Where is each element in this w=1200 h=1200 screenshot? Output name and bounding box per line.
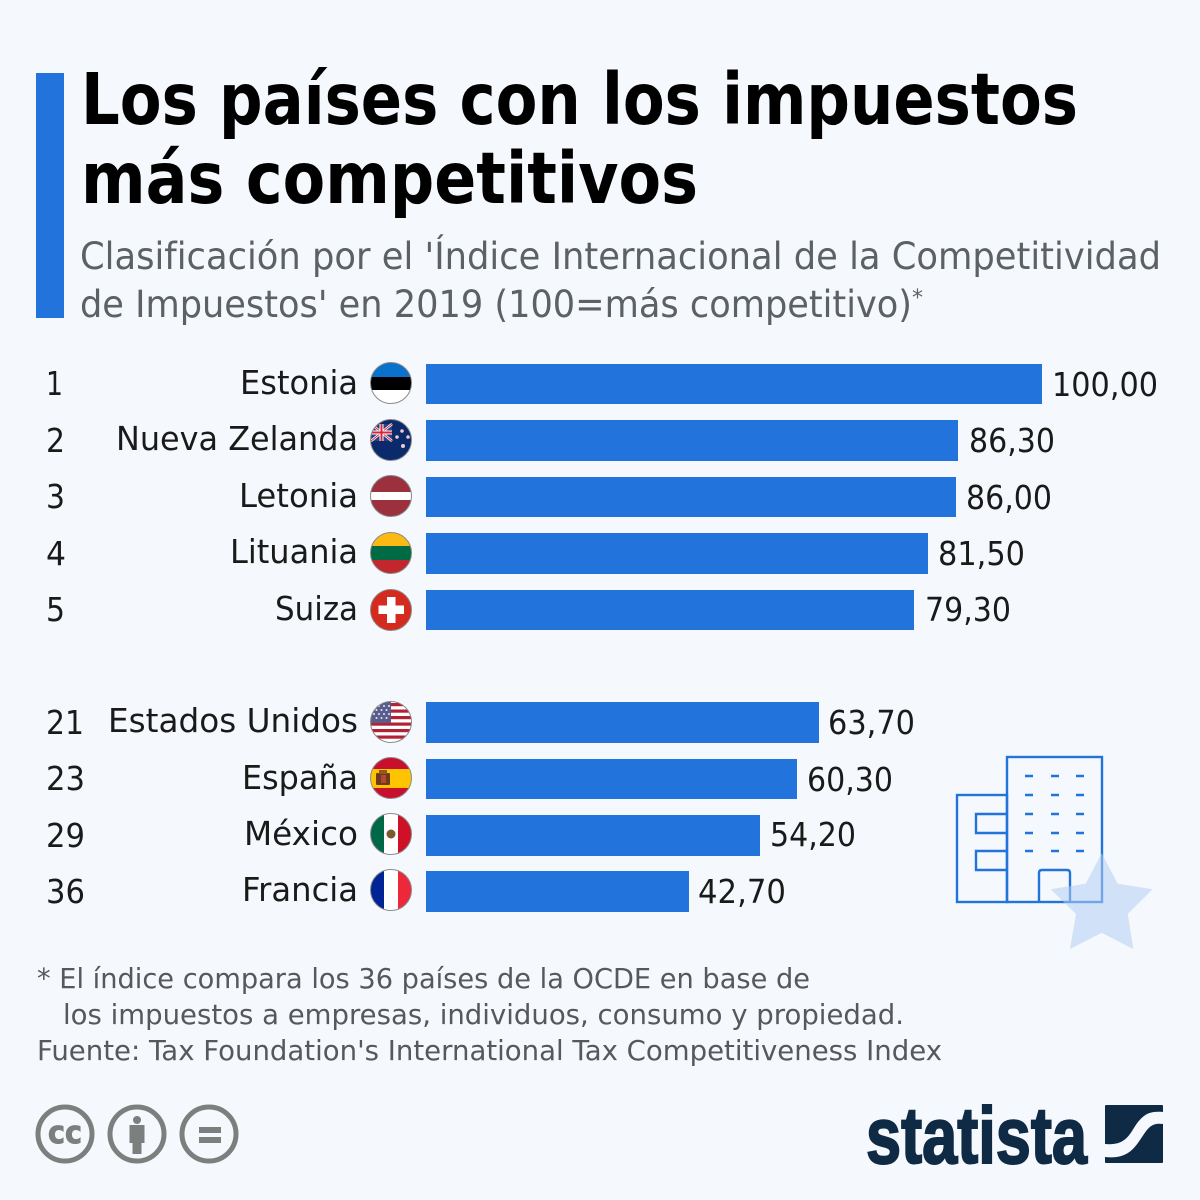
- chart: selected countries: [46, 701, 915, 912]
- row: Estonia: [46, 362, 1158, 404]
- row: España: 23: [46, 759, 85, 798]
- row: México: [46, 813, 856, 856]
- footnote and source: Fuente: Tax Foundation's International Tax Competitiveness Index: [37, 1034, 942, 1067]
- row: Lituania: 81,50: [938, 534, 1025, 573]
- row: España: España: [242, 758, 358, 797]
- row: Suiza: 5: [46, 590, 65, 629]
- icon: no derivatives: [182, 1107, 236, 1161]
- subtitle: de Impuestos' en 2019 (100=más competitivo): [80, 283, 912, 326]
- row: Estados Unidos: 63,70: [828, 703, 915, 742]
- subtitle: Clasificación por el 'Índice Internacional de la Competitividad: [80, 234, 1161, 278]
- icon: attribution: [110, 1107, 164, 1161]
- row: Estonia: 1: [46, 364, 63, 403]
- row: Letonia: 86,00: [966, 478, 1052, 517]
- subtitle: [80, 234, 1161, 326]
- row: Letonia: Letonia: [239, 476, 358, 515]
- row: Lituania: 4: [46, 534, 66, 573]
- footnote and source: [37, 962, 942, 1067]
- title: [81, 58, 1078, 220]
- footnote and source: los impuestos a empresas, individuos, consumo y propiedad.: [63, 998, 904, 1031]
- row: México: 54,20: [770, 815, 856, 854]
- subtitle: *: [912, 286, 923, 311]
- row: España: [46, 757, 893, 799]
- row: Suiza: Suiza: [275, 589, 358, 628]
- row: Letonia: [46, 475, 1052, 517]
- row: Estados Unidos: 21: [46, 703, 84, 742]
- row: Estonia: Estonia: [240, 363, 358, 402]
- footnote and source: * El índice compara los 36 países de la OCDE en base de: [37, 962, 810, 995]
- row: Suiza: [46, 589, 1011, 630]
- row: Francia: [46, 869, 786, 912]
- row: Estonia: 100,00: [1052, 365, 1158, 404]
- row: Estados Unidos: [46, 701, 915, 743]
- row: Nueva Zelanda: Nueva Zelanda: [116, 419, 358, 458]
- row: España: 60,30: [807, 760, 893, 799]
- title accent bar: [36, 73, 64, 318]
- icon: creative commons: [38, 1107, 92, 1161]
- row: Estados Unidos: Estados Unidos: [108, 701, 358, 740]
- row: México: México: [244, 814, 358, 853]
- row: México: 29: [46, 816, 85, 855]
- logo: statista: statista: [866, 1091, 1087, 1180]
- icon: building with star: [957, 757, 1153, 949]
- row: Nueva Zelanda: [46, 419, 1055, 461]
- row: Lituania: Lituania: [230, 532, 358, 571]
- row: Letonia: 3: [46, 477, 65, 516]
- row: Francia: Francia: [242, 870, 358, 909]
- row: Nueva Zelanda: 86,30: [969, 421, 1055, 460]
- title: más competitivos: [81, 137, 698, 220]
- chart: top five countries: [46, 362, 1158, 630]
- row: Suiza: 79,30: [925, 590, 1011, 629]
- row: Francia: 42,70: [698, 872, 786, 911]
- row: Francia: 36: [46, 872, 85, 911]
- row: Lituania: [46, 532, 1025, 574]
- icon: creative commons: cc: [48, 1115, 82, 1151]
- row: Nueva Zelanda: 2: [46, 421, 65, 460]
